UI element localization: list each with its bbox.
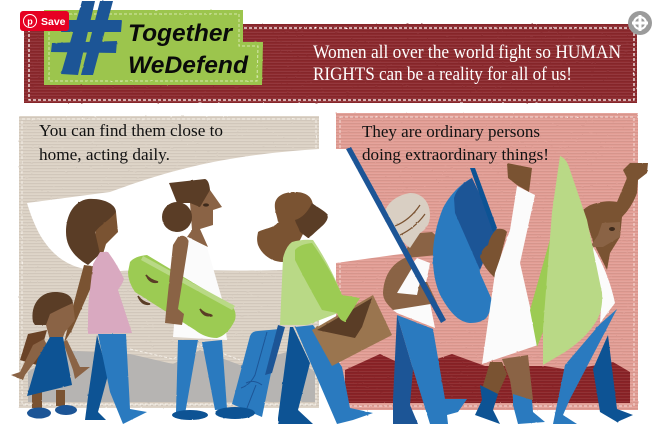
text: left caption <box>39 121 223 164</box>
header banner <box>24 24 637 103</box>
figure: child <box>11 292 90 418</box>
text: right caption: They are ordinary persons <box>362 122 540 141</box>
dark red hills <box>345 354 630 403</box>
panel: beige background <box>19 116 319 408</box>
figure: mother <box>64 199 147 424</box>
header statement: RIGHTS can be a reality for all of us! <box>313 64 572 85</box>
title <box>128 20 249 79</box>
blue rolled bag <box>232 325 285 417</box>
icon: hashtag <box>51 1 122 75</box>
figure: woman in white dress with raised fist <box>475 163 545 424</box>
title: WeDefend <box>128 52 249 79</box>
figure: woman with green cape and raised fist <box>530 156 648 424</box>
figure: woman with satchel <box>257 192 392 424</box>
panel: pink background <box>336 113 638 410</box>
figure: woman with green board <box>128 179 255 420</box>
green title tag <box>44 10 263 85</box>
figure: blue flag <box>433 168 497 323</box>
text: right caption <box>362 122 549 164</box>
icon: gray expand button <box>628 11 652 35</box>
white banner sweep <box>27 116 408 271</box>
text: left caption: home, acting daily. <box>39 145 170 164</box>
button: Pinterest save <box>20 11 69 31</box>
gray hills <box>25 345 316 404</box>
header statement <box>313 42 621 85</box>
text: right caption: doing extraordinary things! <box>362 145 549 164</box>
title: Together <box>128 20 234 47</box>
figure: woman with turban and flag pole <box>346 147 467 424</box>
button: Pinterest save: Save <box>41 16 66 28</box>
button: Pinterest save: p <box>27 16 33 26</box>
text: left caption: You can find them close to <box>39 121 223 140</box>
header statement: Women all over the world fight so HUMAN <box>313 42 621 63</box>
